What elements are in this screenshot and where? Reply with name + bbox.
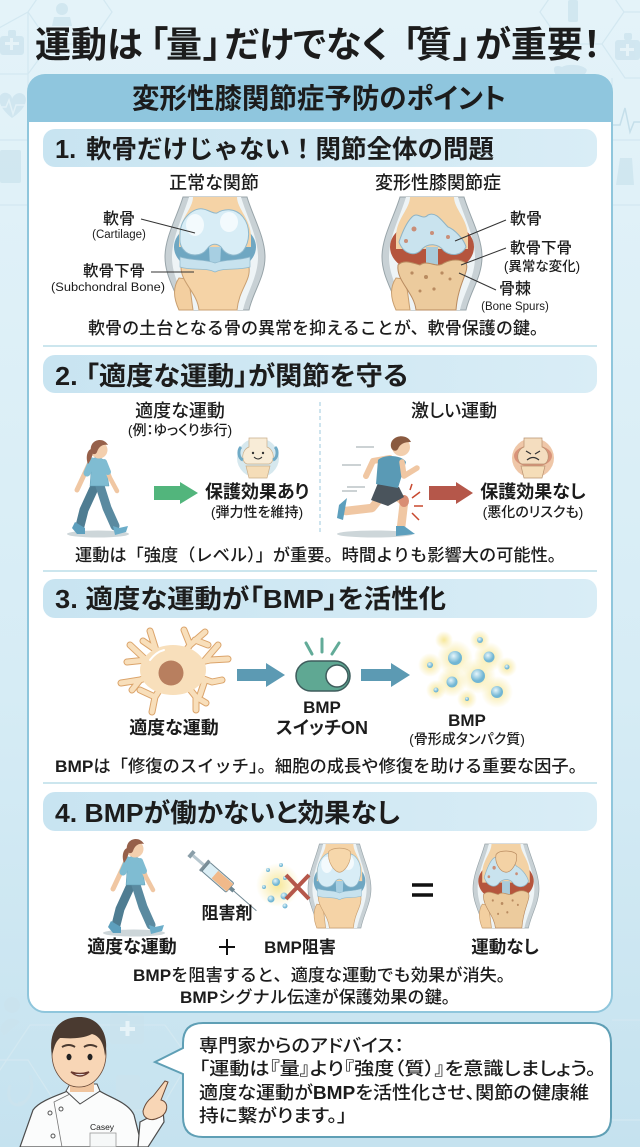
result: protective effect [205,482,309,520]
section 3 caption: BMPは「修復のスイッチ」。細胞の成長や修復を助ける重要な因子。 [55,757,586,776]
labels for osteoarthritic knee: (Bone Spurs) [481,301,549,313]
labels for osteoarthritic knee: 軟骨下骨 [510,239,572,257]
section 2: heading [43,355,597,393]
speech bubble: expert advice: 持に繋がります。」 [199,1105,347,1126]
icon: BMP particles [418,630,517,709]
speech bubble: expert advice [155,1023,611,1137]
label: BMP switch on: BMP [303,698,341,717]
result: protective effect: 保護効果あり [205,482,309,502]
label: BMP bone morphogenetic protein [409,711,525,747]
section 4: heading: 4. BMPが働かないと効果なし [55,798,400,828]
diagram: osteoarthritic knee joint [382,197,482,310]
icon: BMP switch on [296,639,350,691]
section 2: heading: 2. 「適度な運動」が関節を守る [55,361,408,391]
speech bubble: expert advice: 専門家からのアドバイス： [199,1036,404,1056]
labels for normal knee: 軟骨下骨 [83,262,145,280]
section 3: heading [43,579,597,618]
main title: 「 [150,24,168,65]
label: BMP switch on: スイッチON [276,718,368,738]
arrow: green [154,482,198,504]
arrow: red [429,482,473,504]
label: normal joint: 正常な関節 [169,173,259,193]
section 2 caption: 運動は「強度（レベル）」が重要。時間よりも影響大の可能性。 [75,545,565,565]
labels for osteoarthritic knee: (異常な変化) [504,259,580,274]
label: BMP bone morphogenetic protein: BMP [448,711,486,730]
labels for normal knee: (Subchondral Bone) [51,282,165,294]
label row: 運動なし [471,937,539,957]
section 1 caption: 軟骨の土台となる骨の異常を抑えることが、軟骨保護の鍵。 [88,318,547,338]
icon: knee with BMP blocked [308,844,371,928]
icon: knee with no exercise [473,844,539,928]
main title: だけでなく [224,24,388,65]
section 1: heading: 1. [55,136,76,164]
icon: BMP particles blocked [256,863,300,908]
section 1: heading [43,129,597,167]
main title: が重要！ [475,24,601,65]
label: osteoarthritis: 変形性膝関節症 [375,173,501,193]
label: moderate exercise: 適度な運動 [135,401,225,421]
diagram: normal knee joint [165,197,265,310]
doctor character: Casey [90,1122,115,1132]
result: no protective effect: 保護効果なし [480,482,586,502]
label: BMP switch on [276,698,368,738]
main title: 運動は [35,24,142,65]
panel header band [28,75,612,122]
icon: walking woman [67,440,129,538]
arrow [237,663,285,687]
label: intense exercise: 激しい運動 [411,401,497,421]
section 1: heading: 軟骨だけじゃない！関節全体の問題 [86,136,494,164]
label: inhibitor: 阻害剤 [202,903,252,923]
label: moderate exercise: (例：ゆっくり歩行) [128,422,232,438]
result: protective effect: (弾力性を維持) [211,504,303,520]
label: BMP bone morphogenetic protein: (骨形成タンパク質) [409,731,525,747]
main title: 」 [453,24,471,65]
equals sign [412,885,433,895]
arrow [361,663,410,687]
label row: 適度な運動 [87,937,177,957]
labels for osteoarthritic knee: 軟骨 [510,210,542,228]
panel heading: 変形性膝関節症予防のポイント [132,83,506,114]
icon: walking woman [103,839,165,936]
labels for normal knee: (Cartilage) [92,229,146,241]
labels for osteoarthritic knee [455,210,580,313]
label: moderate exercise [128,401,232,438]
section 4 caption [133,965,514,1007]
result: no protective effect [480,482,586,520]
labels for normal knee [51,210,195,294]
main title: 質 [416,24,452,65]
label row: BMP阻害 [264,937,336,957]
doctor character [20,1017,168,1147]
label: moderate exercise: 適度な運動 [129,718,219,738]
section 4 caption: BMPシグナル伝達が保護効果の鍵。 [180,987,459,1007]
icon: bone cell [121,630,228,712]
main title: 「 [403,24,421,65]
labels for normal knee: 軟骨 [103,210,135,228]
section 3: heading: 3. 適度な運動が「BMP」を活性化 [55,584,446,614]
speech bubble: expert advice: 適度な運動が BMPを活性化させ、関節の健康維 [199,1082,589,1103]
panel: knee osteoarthritis prevention points [28,75,612,1012]
icon: sad knee [512,438,554,478]
labels for osteoarthritic knee: 骨棘 [499,280,531,298]
main title: 」 [203,24,221,65]
result: no protective effect: (悪化のリスクも) [483,504,583,520]
icon: syringe [185,848,261,916]
main title: 量 [166,24,202,65]
speech bubble: expert advice: 「運動は『量』より『強度（質）』を意識しましょう。 [199,1059,596,1079]
icon: running man [337,436,423,538]
icon: happy knee [237,438,279,478]
section 4: heading [43,792,597,831]
label row [87,937,539,957]
icon: red cross mark [286,875,309,899]
section 4 caption: BMPを阻害すると、適度な運動でも効果が消失。 [133,965,514,985]
